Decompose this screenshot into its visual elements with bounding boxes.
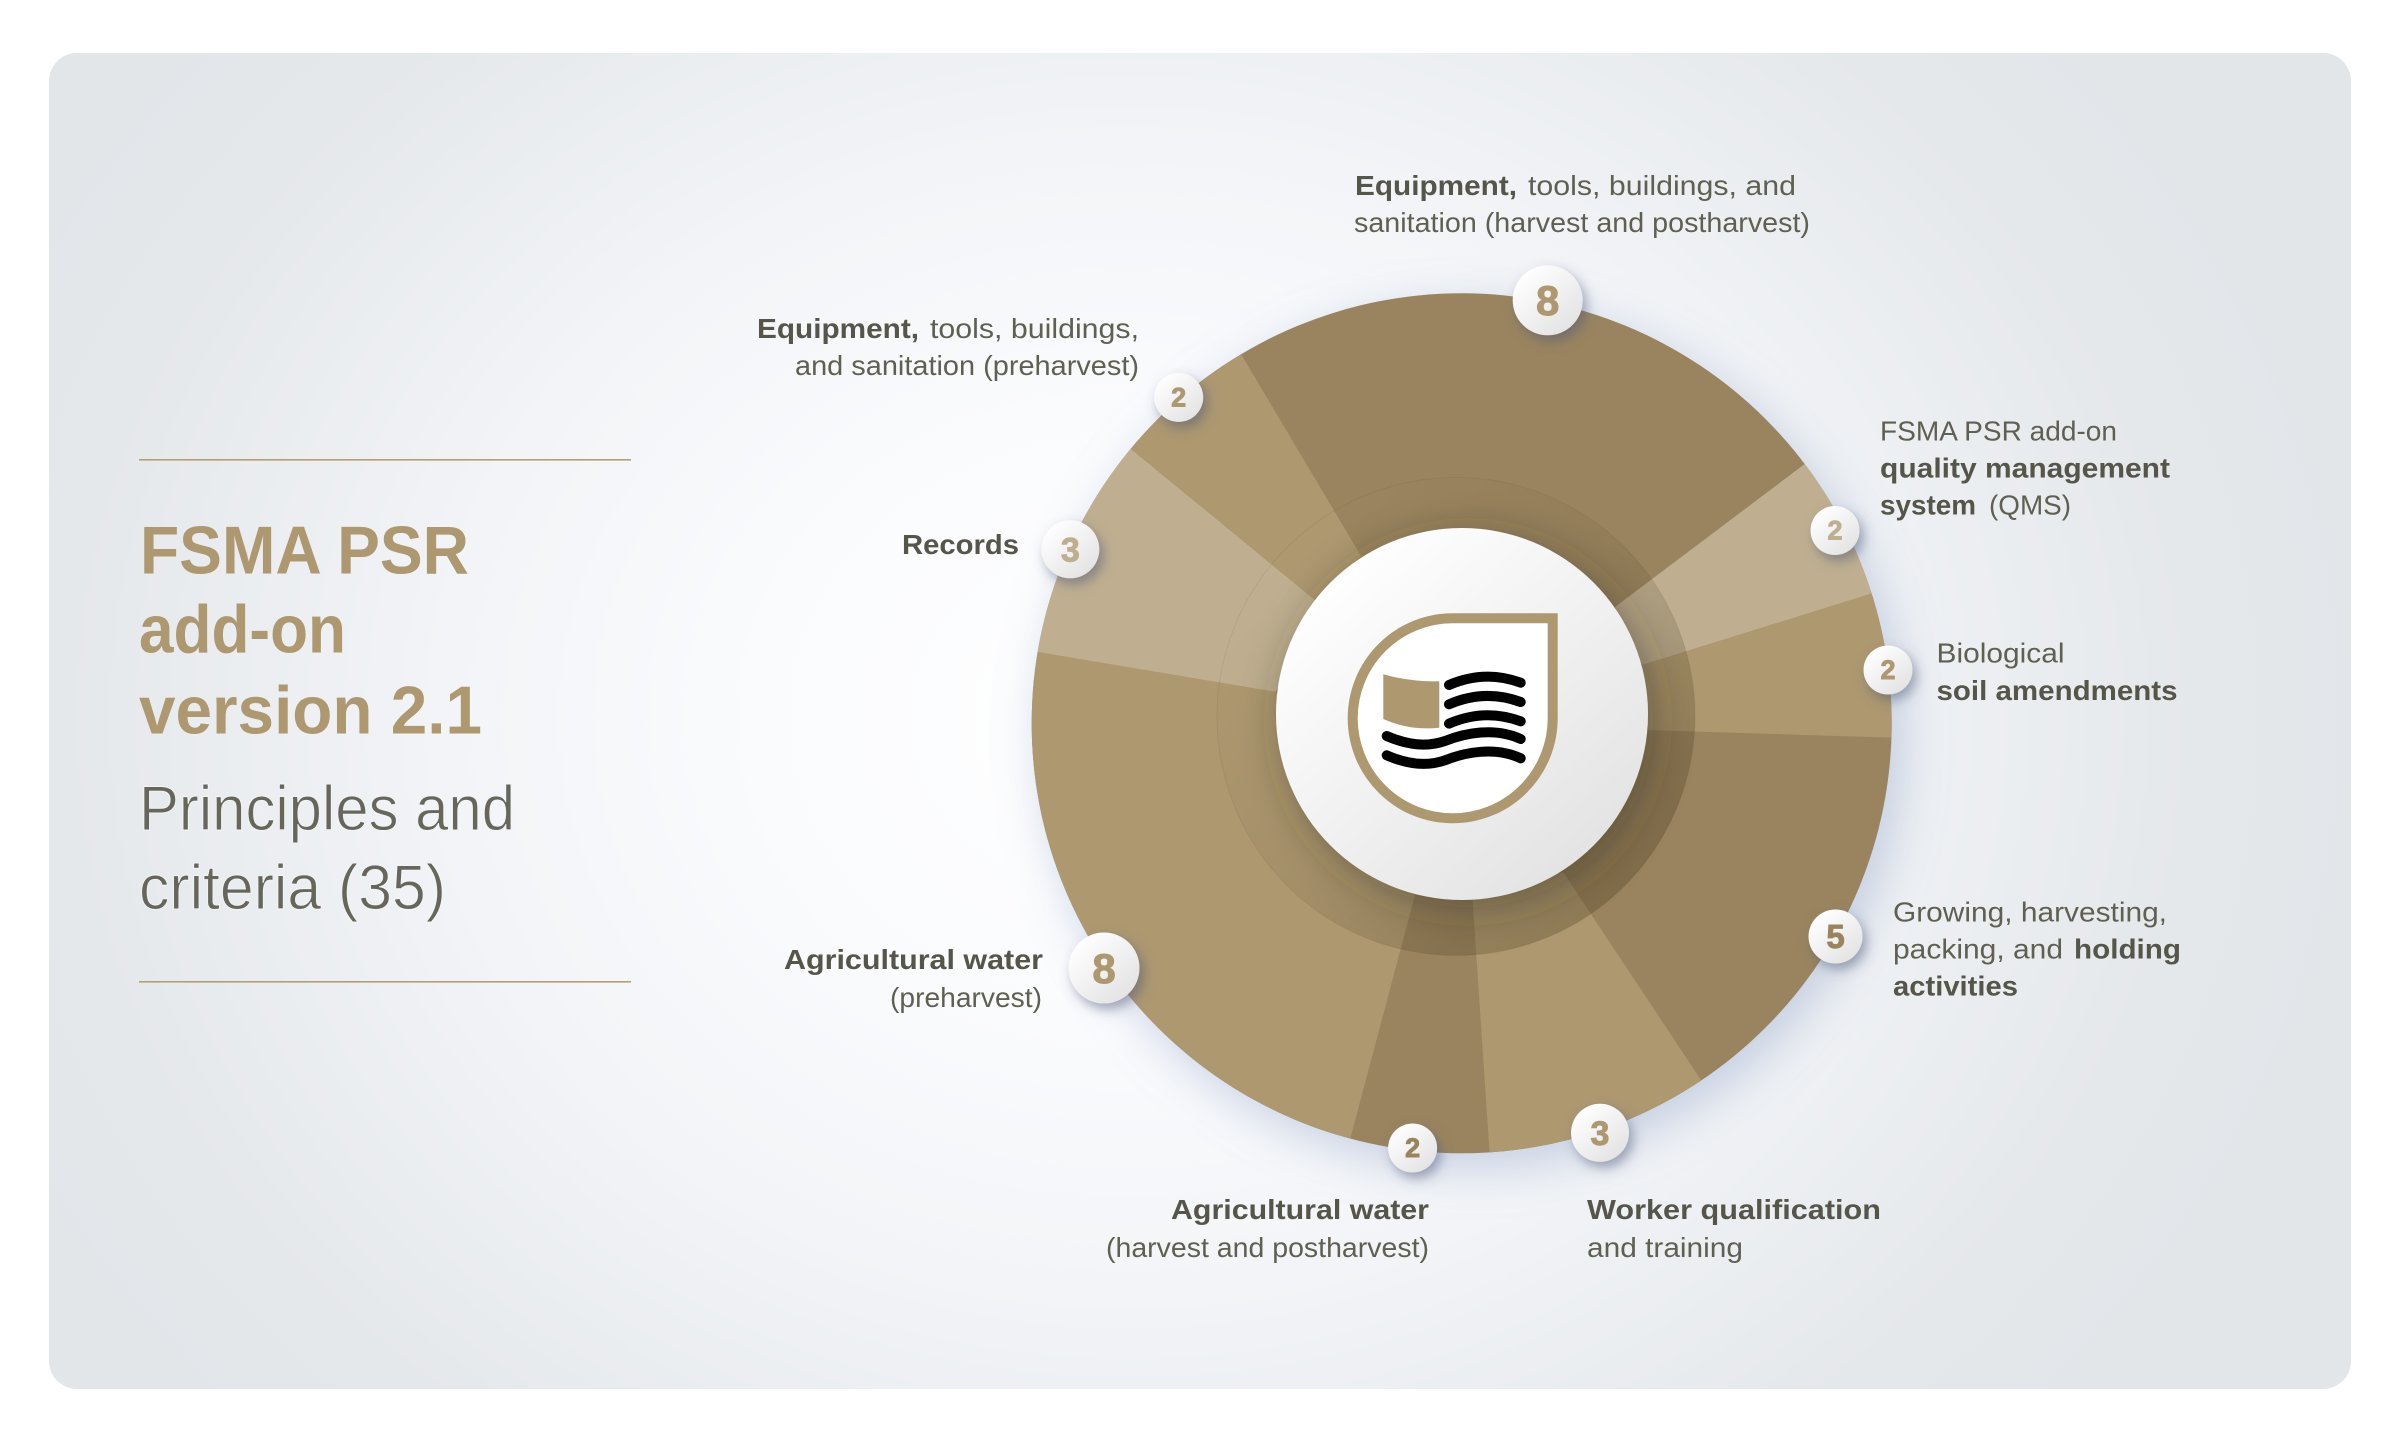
label: worker qualification: and training (1587, 1232, 1743, 1263)
subtitle: Principles and (139, 774, 515, 844)
badge: 8 agricultural water preharvest: 8 (1092, 945, 1116, 992)
pie segments (1032, 354, 1892, 1152)
inner ring overlay (1217, 478, 1695, 956)
badge: 2 QMS (1810, 506, 1860, 555)
label: growing harvesting: holding (2074, 934, 2181, 964)
center disc (1276, 528, 1648, 900)
icon: shield logo with flag and waves (1353, 618, 1553, 818)
label: quality management system: (QMS) (1989, 490, 2071, 520)
label: equipment preharvest: Equipment, (757, 313, 919, 344)
badge: 5 growing (1808, 910, 1862, 964)
label: growing harvesting: Growing, harvesting, (1893, 896, 2167, 928)
label: quality management system: system (1880, 490, 1976, 520)
badge: 2 biological: 2 (1880, 655, 1896, 685)
subtitle: criteria (35) (139, 853, 446, 923)
label: worker qualification: Worker qualification (1587, 1194, 1881, 1225)
badge: 8 equipment harvest (1513, 265, 1583, 335)
label: agricultural water preharvest (784, 944, 1043, 1013)
label: equipment preharvest: and sanitation (preharvest) (795, 350, 1139, 381)
label: quality management system (1880, 416, 2170, 520)
subtitle (139, 774, 515, 923)
label: equipment harvest and postharvest: tools, buildings, and (1528, 170, 1796, 201)
label: biological soil amendments: soil amendments (1936, 675, 2178, 706)
badge: 2 agricultural water harvest: 2 (1405, 1133, 1420, 1163)
label: equipment preharvest: tools, buildings, (930, 313, 1139, 344)
infographic canvas (139, 175, 2179, 1263)
label: equipment harvest and postharvest: Equipment, (1355, 170, 1517, 201)
label: biological soil amendments (1936, 638, 2178, 706)
label: agricultural water harvest: Agricultural water (1171, 1194, 1429, 1225)
label: growing harvesting (1893, 896, 2181, 1002)
badge: 2 QMS: 2 (1827, 516, 1843, 546)
badge: 5 growing: 5 (1826, 918, 1845, 955)
label: agricultural water harvest (1106, 1194, 1429, 1263)
label: equipment preharvest (757, 313, 1139, 381)
badge: 2 equipment preharvest: 2 (1171, 382, 1186, 412)
label: quality management system: quality management (1880, 452, 2170, 484)
label: agricultural water preharvest: (preharvest) (890, 982, 1042, 1013)
label: records: Records (902, 529, 1019, 560)
label: equipment harvest and postharvest (1354, 170, 1810, 238)
label: growing harvesting: activities (1893, 970, 2018, 1002)
label: biological soil amendments: Biological (1936, 638, 2064, 668)
label: growing harvesting: packing, and (1893, 934, 2063, 964)
label: equipment harvest and postharvest: sanitation (harvest and postharvest) (1354, 207, 1810, 238)
title: FSMA PSR (140, 512, 469, 588)
label: agricultural water preharvest: Agricultural water (784, 944, 1043, 975)
badge: 3 worker (1571, 1104, 1629, 1162)
pie base and shadow (1032, 293, 1892, 1153)
badge: 8 equipment harvest: 8 (1536, 277, 1559, 324)
badge: 2 biological (1864, 646, 1912, 694)
badge: 3 worker: 3 (1591, 1115, 1609, 1153)
badge: 3 records: 3 (1061, 532, 1080, 570)
label: quality management system: FSMA PSR add-on (1880, 416, 2117, 446)
donut chart (1020, 286, 1922, 1188)
label: worker qualification (1587, 1194, 1881, 1263)
title: version 2.1 (139, 672, 482, 748)
badge: 8 agricultural water preharvest (1068, 932, 1140, 1004)
badge: 2 agricultural water harvest (1388, 1124, 1437, 1172)
title (139, 512, 482, 748)
title block (139, 512, 515, 923)
badge: 3 records (1041, 520, 1099, 578)
badge: 2 equipment preharvest (1154, 373, 1203, 422)
title: add-on (139, 592, 346, 668)
label: agricultural water harvest: (harvest and postharvest) (1106, 1232, 1429, 1263)
